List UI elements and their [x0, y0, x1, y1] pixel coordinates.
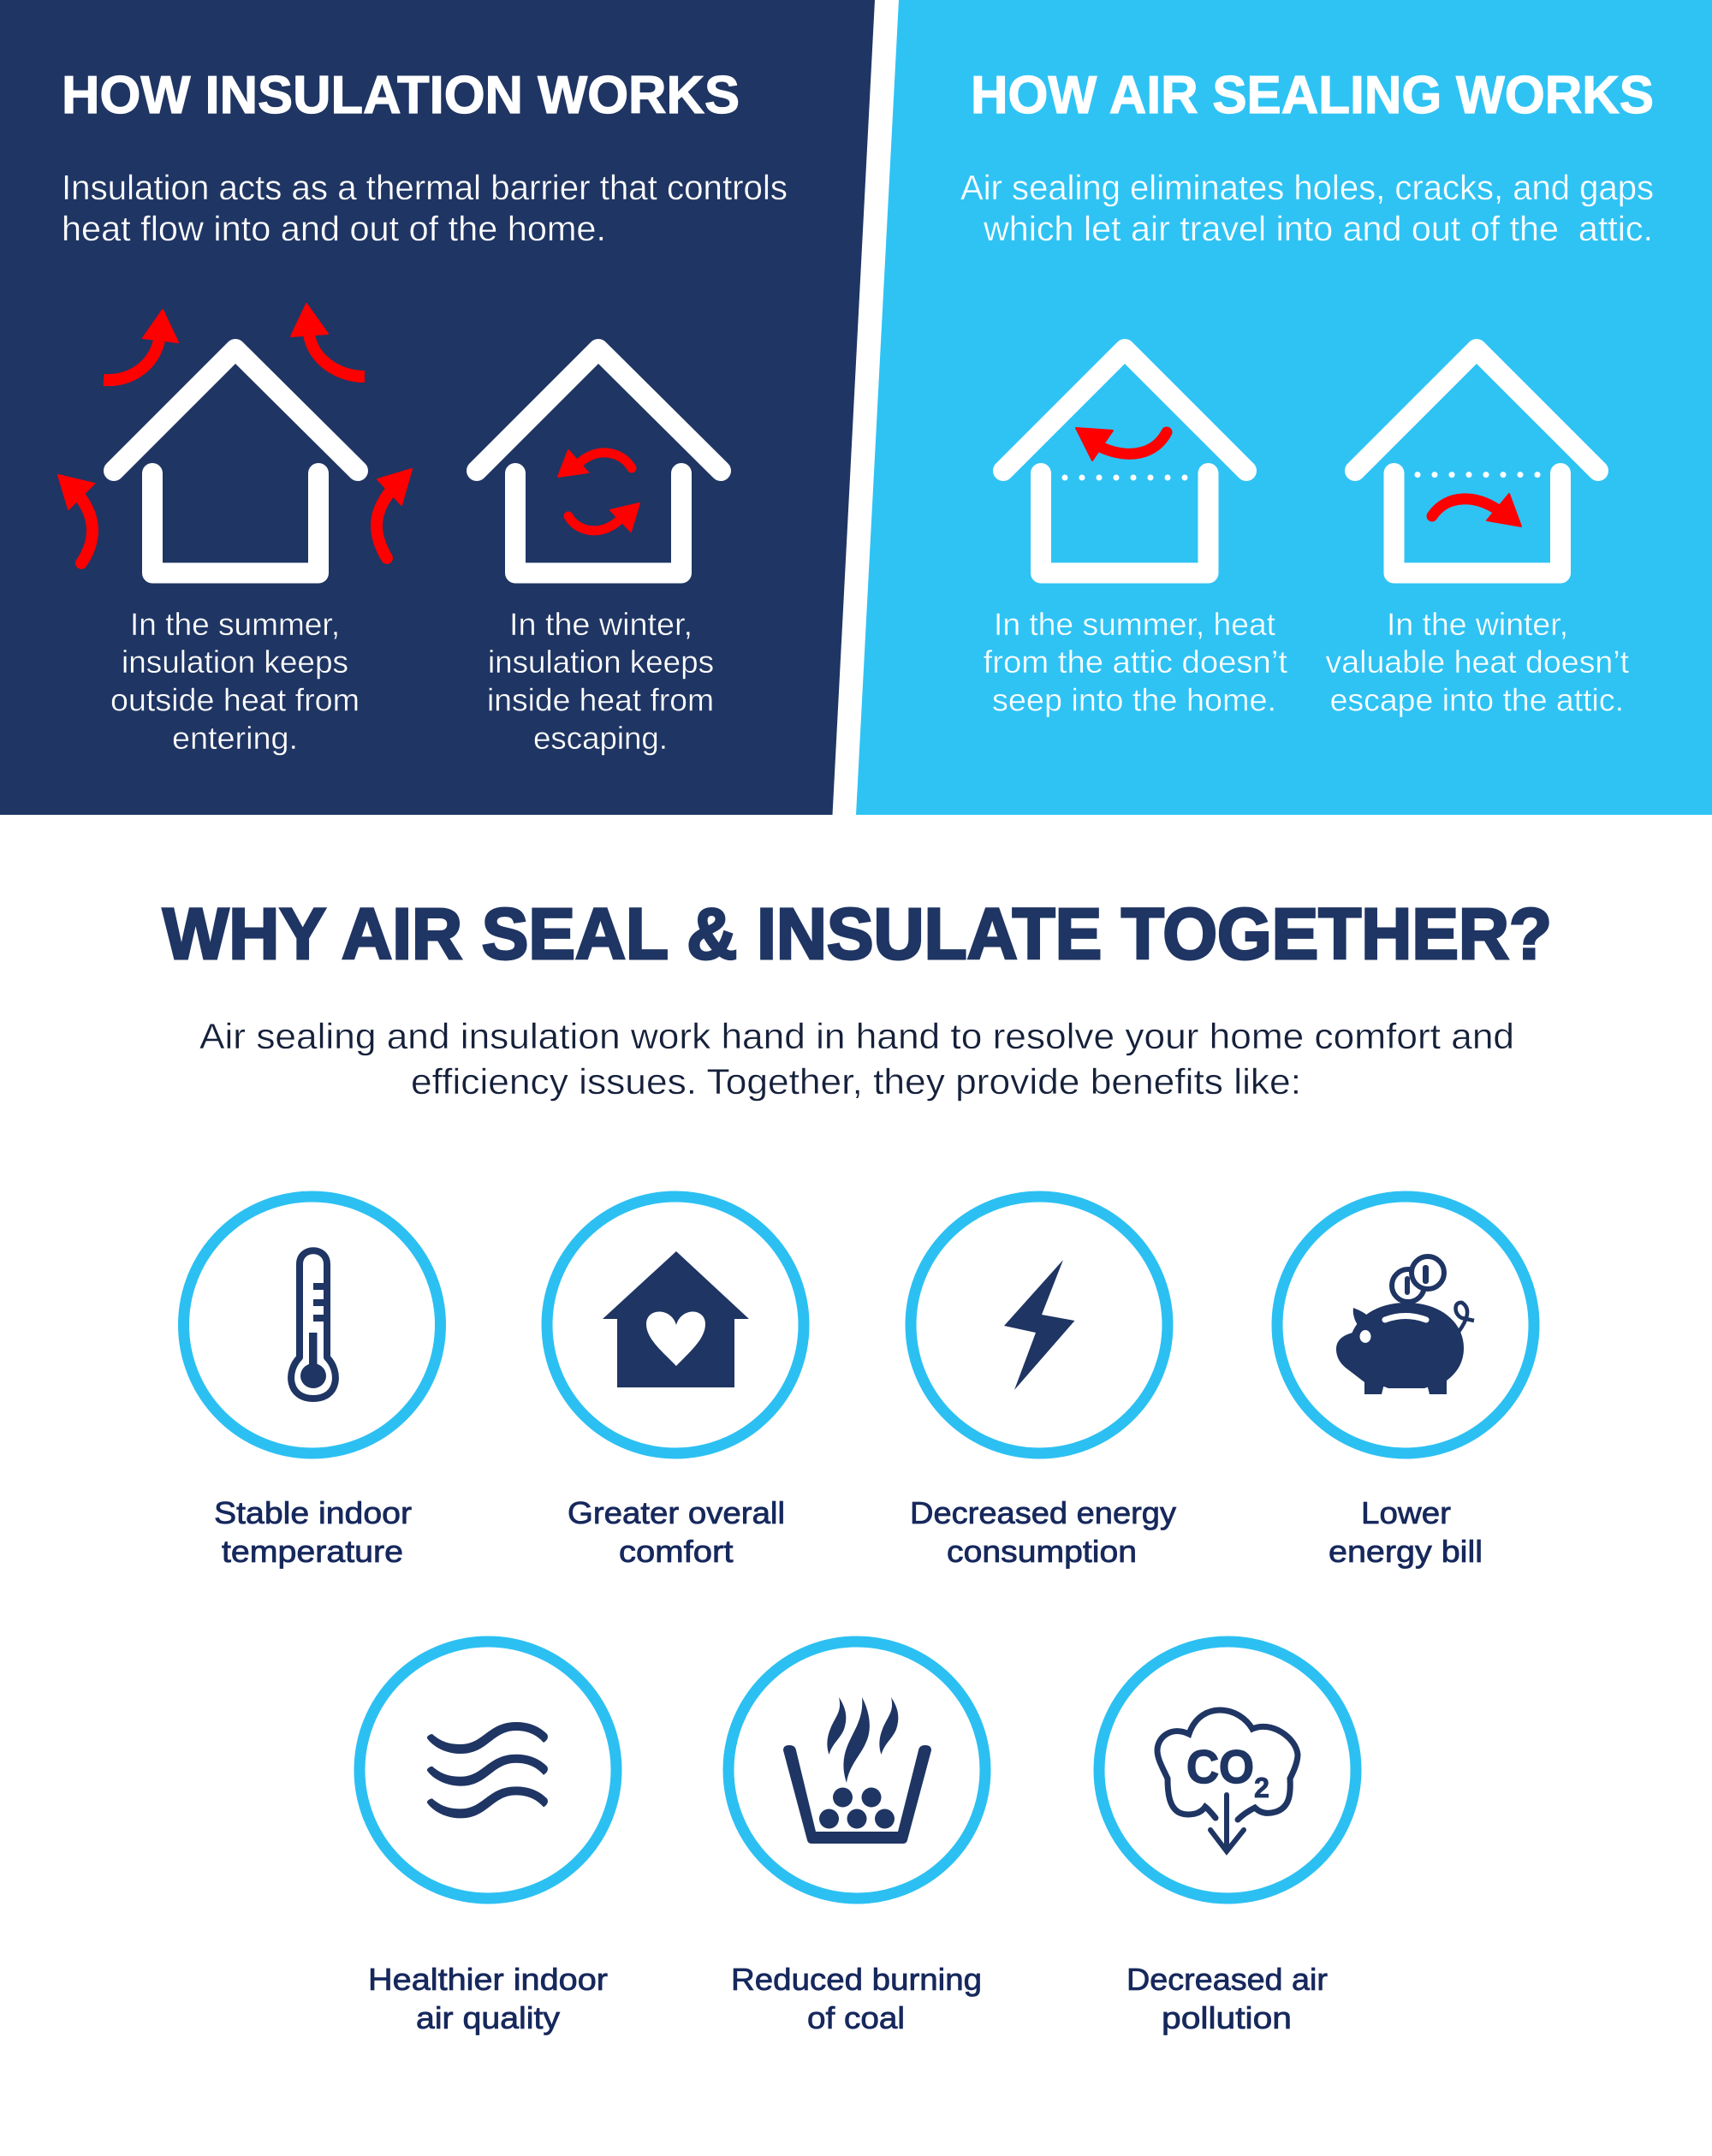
label: healthier indoor air quality: Healthier indoor — [368, 1962, 608, 1997]
heading: how air sealing works: HOW AIR SEALING WORKS — [971, 66, 1654, 125]
text block: benefits intro: efficiency issues. Together, they provide benefits like: — [411, 1061, 1301, 1102]
arrow: left heat — [58, 475, 94, 563]
arrow: top right heat — [291, 304, 365, 377]
benefit: lower energy bill — [1277, 1197, 1534, 1569]
text block: winter air sealing caption: In the winter, — [1387, 607, 1568, 642]
arrow: winter upper circular — [558, 450, 632, 477]
benefit: decreased air pollution — [1099, 1642, 1356, 2035]
text block: insulation intro: Insulation acts as a thermal barrier that controls — [62, 168, 788, 207]
icon: piggy bank with coins — [1336, 1256, 1474, 1394]
text block: winter insulation caption: In the winter, — [509, 607, 693, 642]
attic air barrier dots — [1414, 472, 1541, 478]
text block: winter air sealing caption: valuable heat doesn’t — [1325, 644, 1630, 680]
text block: insulation intro — [62, 168, 788, 248]
benefit: stable indoor temperature — [183, 1197, 440, 1569]
panel: how air sealing works — [856, 0, 1712, 815]
label: reduced burning of coal: Reduced burning — [731, 1962, 982, 1997]
benefit: healthier indoor air quality — [360, 1642, 616, 2035]
label: greater overall comfort: Greater overall — [568, 1495, 785, 1530]
text block: summer air sealing caption: In the summer, heat — [994, 607, 1276, 642]
icon: summer air sealing house — [1003, 349, 1246, 573]
arrow: top left heat — [104, 310, 178, 380]
attic air barrier dots — [1061, 474, 1188, 481]
text block: air sealing intro — [960, 168, 1654, 248]
label: reduced burning of coal: of coal — [807, 2000, 905, 2035]
text block: summer air sealing caption: from the attic doesn’t — [984, 644, 1288, 680]
heading: how insulation works: HOW INSULATION WORKS — [62, 66, 740, 125]
text block: winter insulation caption: escaping. — [533, 721, 668, 756]
text block: air sealing intro: which let air travel into and out of the attic. — [983, 209, 1653, 248]
arrow: winter lower circular — [568, 503, 639, 532]
label: greater overall comfort: comfort — [619, 1534, 733, 1569]
text block: winter insulation caption — [487, 607, 714, 756]
arrow: heat kept in home — [1432, 494, 1521, 526]
label: healthier indoor air quality: air quality — [416, 2000, 560, 2035]
icon: winter insulation house — [477, 349, 721, 573]
text block: winter insulation caption: insulation keeps — [488, 644, 714, 680]
icon: co2 cloud with arrow: CO — [1186, 1740, 1254, 1793]
label: decreased air pollution: pollution — [1162, 2000, 1292, 2035]
arrow: right heat — [377, 469, 412, 558]
heading: why air seal and insulate together: WHY AIR SEAL & INSULATE TOGETHER? — [163, 894, 1552, 974]
benefit: greater overall comfort — [547, 1197, 804, 1569]
icon: co2 cloud with arrow: 2 — [1254, 1772, 1269, 1803]
label: decreased air pollution: Decreased air — [1126, 1962, 1328, 1997]
icon: summer insulation house — [58, 304, 412, 573]
text block: winter air sealing caption — [1325, 607, 1630, 717]
label: decreased energy consumption: consumption — [947, 1534, 1137, 1569]
arrow: attic heat blocked — [1076, 428, 1167, 460]
label: lower energy bill — [1329, 1495, 1483, 1569]
text block: summer insulation caption: In the summer, — [130, 607, 340, 642]
label: healthier indoor air quality — [368, 1962, 608, 2035]
icon: coal basket with smoke — [783, 1697, 931, 1844]
icon: co2 cloud with arrow — [1157, 1710, 1298, 1851]
text block: summer air sealing caption: seep into the home. — [992, 683, 1276, 717]
text block: summer insulation caption: outside heat from — [110, 683, 360, 717]
label: decreased air pollution — [1126, 1962, 1328, 2035]
text block: summer insulation caption: entering. — [172, 721, 298, 756]
benefit: reduced burning of coal — [728, 1642, 985, 2035]
label: decreased energy consumption — [910, 1495, 1176, 1569]
label: reduced burning of coal — [731, 1962, 982, 2035]
text block: air sealing intro: Air sealing eliminates holes, cracks, and gaps — [960, 168, 1654, 207]
icon: house with heart — [603, 1251, 749, 1387]
benefit: decreased energy consumption — [910, 1197, 1176, 1569]
text block: winter air sealing caption: escape into the attic. — [1330, 683, 1624, 717]
text block: benefits intro: Air sealing and insulation work hand in hand to resolve your home comfort and — [199, 1016, 1514, 1056]
panel: how insulation works — [0, 0, 875, 815]
icon: thermometer — [291, 1250, 336, 1399]
text block: summer insulation caption: insulation keeps — [122, 644, 348, 680]
text block: winter insulation caption: inside heat from — [487, 683, 714, 717]
label: lower energy bill: Lower — [1361, 1495, 1451, 1530]
icon: lightning bolt — [1004, 1260, 1075, 1390]
text block: summer air sealing caption — [984, 607, 1288, 717]
label: decreased energy consumption: Decreased energy — [910, 1495, 1176, 1530]
icon: winter air sealing house — [1355, 349, 1598, 573]
label: stable indoor temperature — [214, 1495, 412, 1569]
label: greater overall comfort — [568, 1495, 785, 1569]
text block: summer insulation caption — [110, 607, 360, 756]
text block: insulation intro: heat flow into and out of the home. — [62, 209, 606, 248]
label: stable indoor temperature: temperature — [222, 1534, 403, 1569]
icon: air waves — [427, 1722, 548, 1818]
label: lower energy bill: energy bill — [1329, 1534, 1483, 1569]
text block: benefits intro — [199, 1016, 1514, 1102]
label: stable indoor temperature: Stable indoor — [214, 1495, 412, 1530]
